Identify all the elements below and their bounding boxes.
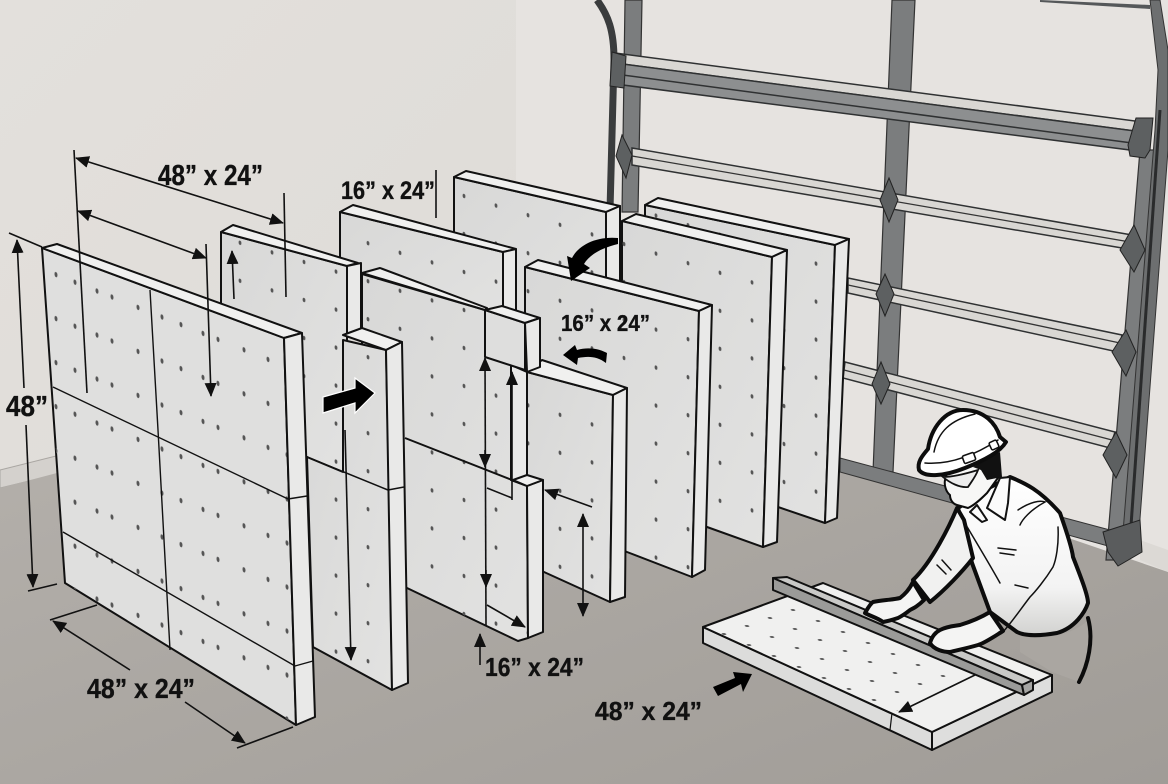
near sleeve [1003,527,1058,632]
icon: straightedge ruler [773,577,1033,695]
background: left baseboard [0,420,200,488]
background: left wall [0,0,516,520]
panel: third right [525,260,712,577]
trousers [1020,618,1091,682]
garage door frame [597,0,1168,566]
panel: rear middle [340,205,516,330]
arrow: curved small [563,345,607,365]
collar [970,477,1010,522]
arrow: curved top [567,238,618,281]
panel: small cut piece [527,360,627,602]
arrow: on lying board [899,675,975,712]
rail 3 [848,278,1122,352]
right curved track [1122,0,1168,545]
arrow: bold to lying board [713,672,752,696]
panel: board lying on floor [703,583,1052,750]
dimension: centre lines [345,170,592,665]
label: 48 x 24 lying board: 48” x 24” [595,696,702,726]
hinges [616,135,632,178]
centre vertical post [873,0,915,472]
dimension: top 48 x 24 lines [74,150,286,396]
top tie rail [1040,0,1150,9]
label: 48 x 24 bottom left: 48” x 24” [87,673,195,704]
panel: back right [645,198,849,523]
label: 16 x 24 right: 16” x 24” [561,310,650,336]
far hand and cuff [865,582,924,622]
far sleeve [913,508,973,602]
hard hat [919,410,1006,475]
safety glasses [943,470,978,487]
panel: middle with notched block [362,268,543,641]
label: 16 x 24 bottom: 16” x 24” [485,652,584,682]
shirt torso [958,477,1088,635]
panel: second from front [221,225,408,690]
label: 48 inch left: 48” [6,391,48,423]
left vertical post [622,0,642,212]
rail 4 [843,362,1115,448]
worker figure [865,410,1091,682]
curved left track [597,0,614,210]
rail 1 [615,53,1135,131]
face [945,460,1000,508]
panel: second right [622,214,787,547]
near hand and cuff [930,612,1003,652]
label: 16 x 24 rear: 16” x 24” [341,177,435,205]
background: right baseboard [1140,540,1168,572]
panel: back centre [454,171,620,345]
right vertical post [1106,150,1158,560]
hair [973,452,1002,480]
background: door wall [516,0,1168,560]
bottom door frame [840,458,1110,546]
background: floor [0,330,1168,784]
arrow: bold black pointing to second panel [323,378,375,413]
panel: front large [42,244,315,725]
dimension: left 48 inch lines [9,233,57,591]
dimension: bottom left lines [50,605,293,748]
rail 2 [632,148,1132,249]
label: 48 x 24 top: 48” x 24” [158,160,263,192]
